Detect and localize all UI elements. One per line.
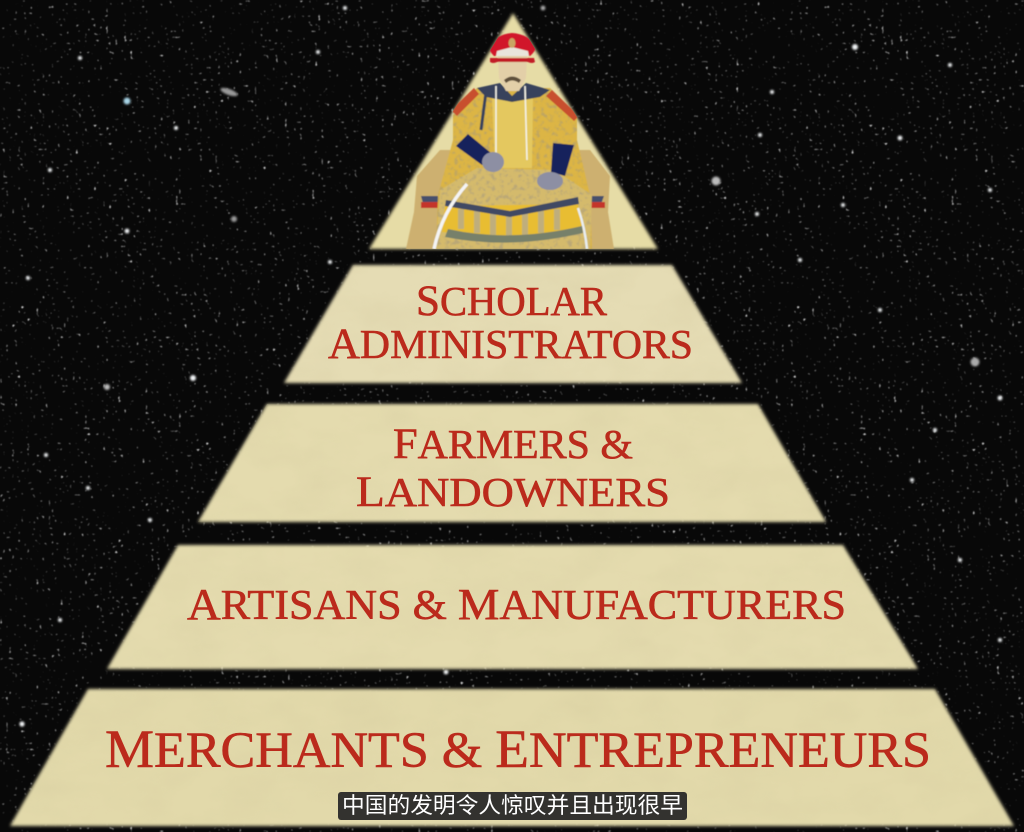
- chest panel: [492, 98, 533, 168]
- red shoulder trim: [451, 88, 479, 116]
- red hat: [489, 33, 536, 56]
- label: landowners: LANDOWNERS: [356, 468, 670, 516]
- robe upper body: [436, 88, 592, 249]
- label: administrators: ADMINISTRATORS: [328, 320, 693, 368]
- apron panels: [442, 204, 583, 237]
- label: scholar: SCHOLAR: [416, 277, 608, 325]
- robe lap: [436, 168, 592, 249]
- pyramid tier: emperor triangle: [369, 13, 658, 249]
- beads: [496, 86, 527, 160]
- label: farmers: FARMERS &: [393, 420, 633, 468]
- pyramid tier: merchants and entrepreneurs: [10, 689, 1014, 826]
- pyramid tier: artisans and manufacturers: [107, 545, 918, 669]
- pyramid tier: scholar administrators: [284, 265, 742, 383]
- pyramid tier: farmers and landowners: [198, 404, 826, 522]
- subtitle caption: 中国的发明令人惊叹并且出现很早: [342, 793, 683, 818]
- face: [498, 56, 527, 91]
- icon: seated emperor portrait: [406, 33, 614, 249]
- triangle background: [369, 13, 658, 249]
- white sash: [434, 184, 467, 249]
- navy sleeves: [456, 134, 491, 165]
- collar: [477, 83, 550, 102]
- robe texture: [436, 88, 592, 249]
- label: merchants and entrepreneurs: MERCHANTS & ENTREPRENEURS: [105, 719, 931, 779]
- hands: [482, 152, 504, 172]
- label: artisans and manufacturers: ARTISANS & MANUFACTURERS: [187, 579, 846, 629]
- throne: [406, 150, 614, 249]
